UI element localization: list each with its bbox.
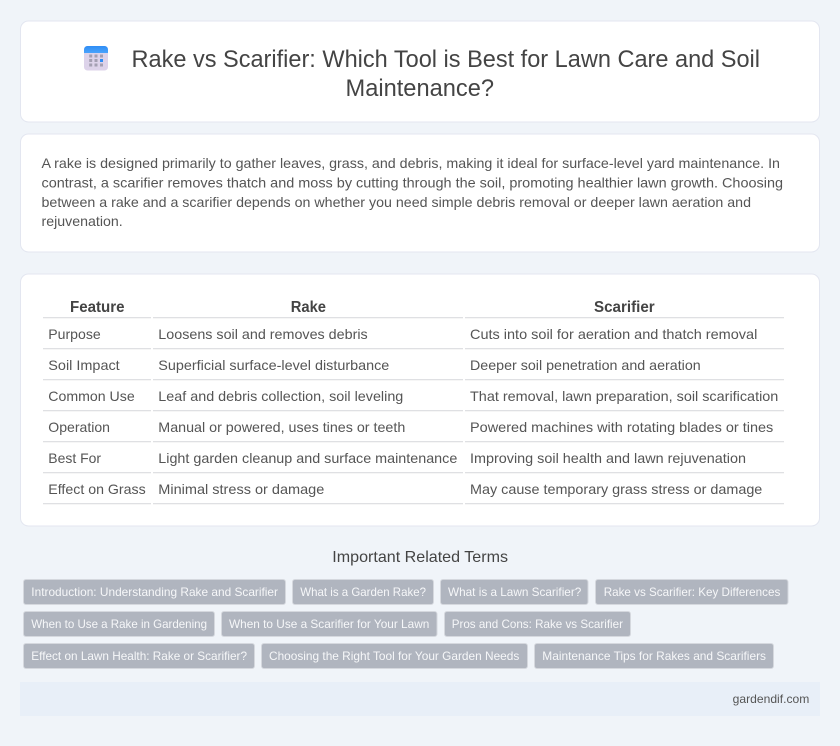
tag: key differences: Rake vs Scarifier: Key Differences [604,585,780,599]
title: Maintenance? [346,75,494,102]
tag: lawn scarifier: What is a Lawn Scarifier? [448,585,582,599]
table header [70,299,655,316]
table header: Feature [70,299,125,316]
row: operation: Operation [48,419,110,435]
icon: calendar [84,46,108,70]
tag: effect on lawn health [24,644,254,668]
row: best for: Improving soil health and lawn rejuvenation [470,450,746,466]
tag: maintenance tips: Maintenance Tips for Rakes and Scarifiers [542,649,766,663]
panel: comparison table [20,274,820,526]
related term tags [24,580,788,668]
table header: Rake [291,299,326,316]
tag: choosing the right tool: Choosing the Right Tool for Your Garden Needs [269,649,519,663]
row: best for [48,450,746,466]
text block: intro [42,155,783,229]
title: Rake vs Scarifier: Which Tool is Best for Lawn Care and Soil [132,46,760,73]
row: effect on grass: Effect on Grass [48,481,146,497]
tag: introduction: Introduction: Understanding Rake and Scarifier [31,585,278,599]
row: common use: That removal, lawn preparation, soil scarification [470,388,778,404]
title [132,46,760,102]
row: effect on grass: May cause temporary grass stress or damage [470,481,763,497]
tag: pros and cons: Pros and Cons: Rake vs Scarifier [452,617,623,631]
tag: effect on lawn health: Effect on Lawn Health: Rake or Scarifier? [31,649,247,663]
tag: lawn scarifier [440,580,588,604]
tag: when to use a scarifier: When to Use a Scarifier for Your Lawn [229,617,429,631]
tag: introduction [24,580,286,604]
row: purpose: Loosens soil and removes debris [158,326,368,342]
tag: when to use a rake: When to Use a Rake in Gardening [31,617,207,631]
panel: title card [20,21,820,122]
row: best for: Light garden cleanup and surface maintenance [158,450,458,466]
tag: maintenance tips [534,644,774,668]
row: effect on grass [48,481,763,497]
heading: important related terms: Important Related Terms [332,549,508,566]
tag: pros and cons [444,612,630,636]
tag: when to use a rake [24,612,214,636]
text block: intro: rejuvenation. [42,213,123,229]
footer bar [20,682,820,716]
tag: key differences [596,580,788,604]
row: effect on grass: Minimal stress or damage [158,481,325,497]
row: common use: Common Use [48,388,135,404]
tag: choosing the right tool [262,644,528,668]
row: common use: Leaf and debris collection, soil leveling [158,388,403,404]
row: best for: Best For [48,450,101,466]
panel: intro paragraph [20,134,820,252]
row: purpose [48,326,757,342]
row: purpose: Purpose [48,326,101,342]
row: soil impact: Deeper soil penetration and aeration [470,357,701,373]
tag: when to use a scarifier [222,612,437,636]
row: soil impact: Soil Impact [48,357,120,373]
row: operation: Powered machines with rotating blades or tines [470,419,773,435]
row: soil impact: Superficial surface-level disturbance [158,357,390,373]
text block: intro: contrast, a scarifier removes thatch and moss by cutting through the soil, promoting healthier lawn growth. Choosing [42,174,783,190]
text block: intro: between a rake and a scarifier depends on whether you need simple debris removal or deeper lawn aeration and [42,194,751,210]
row: operation: Manual or powered, uses tines or teeth [158,419,405,435]
row: soil impact [48,357,701,373]
row: common use [48,388,778,404]
row: operation [48,419,773,435]
row: purpose: Cuts into soil for aeration and thatch removal [470,326,757,342]
text block: intro: A rake is designed primarily to gather leaves, grass, and debris, making it ideal for surface-level yard maintenance. In [42,155,780,171]
tag: garden rake: What is a Garden Rake? [300,585,426,599]
footer source text: gardendif.com [733,692,809,706]
table header: Scarifier [594,299,655,316]
tag: garden rake [292,580,434,604]
